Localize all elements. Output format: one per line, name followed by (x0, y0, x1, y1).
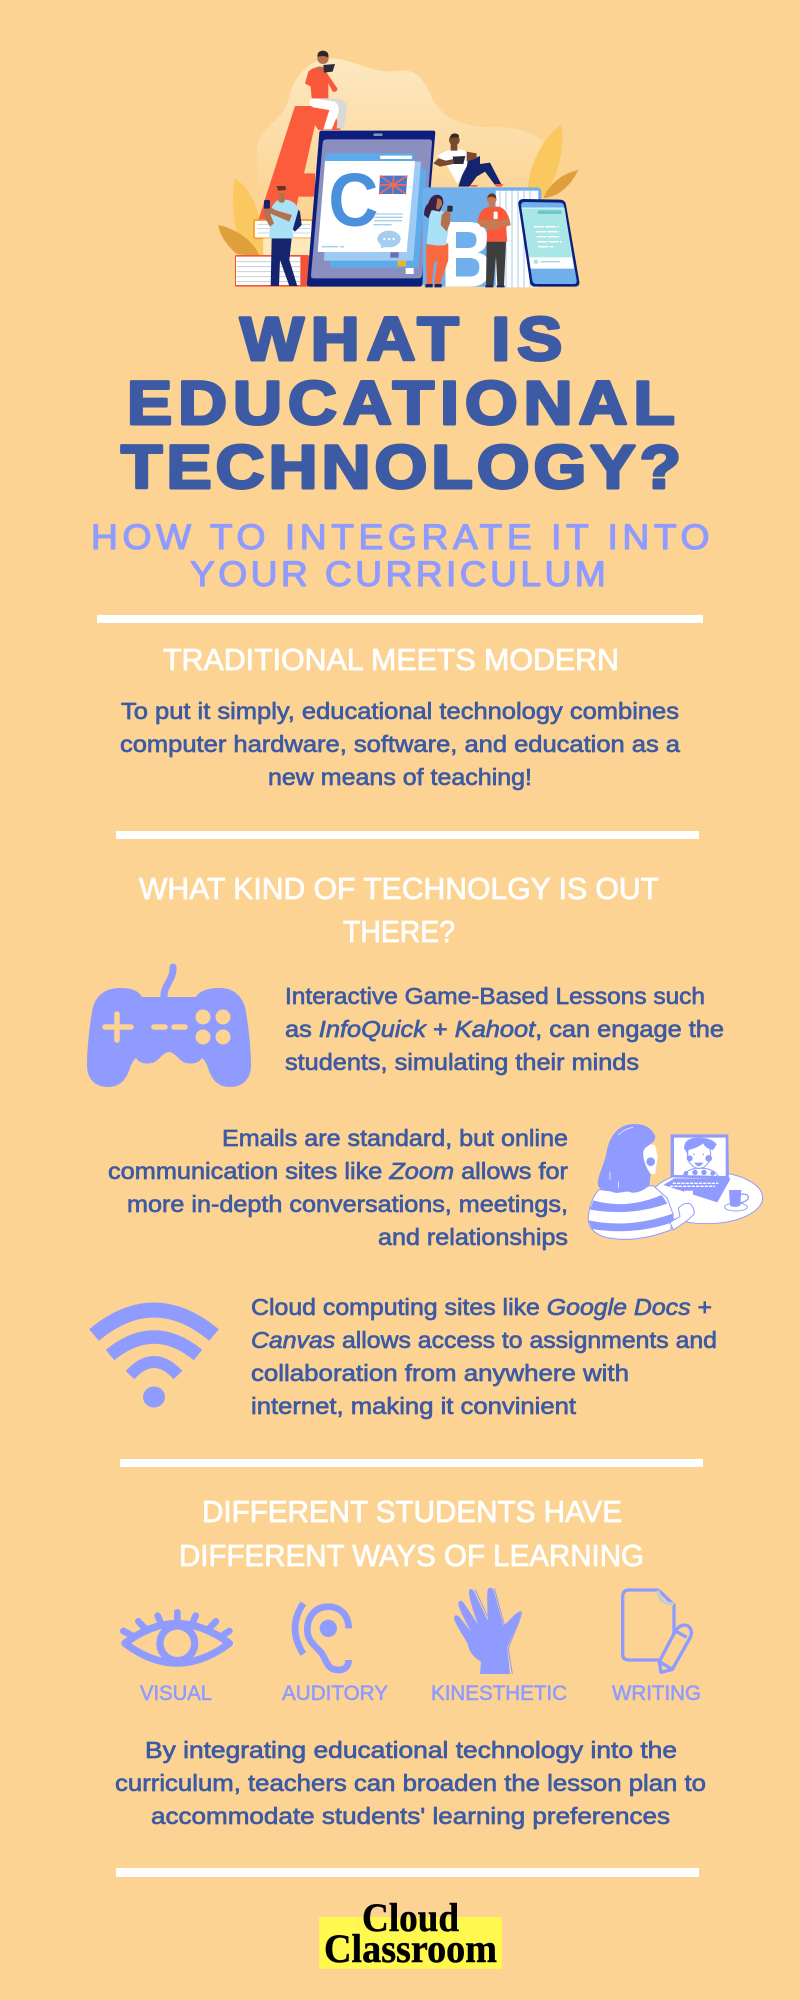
man in red shirt (477, 193, 511, 287)
text block: online communication: Emails are standard, but online (222, 1125, 568, 1151)
hero illustration: students with books, tablet and phone: C (328, 158, 378, 242)
icon: game controller (87, 967, 251, 1087)
heading: different ways of learning (179, 1495, 644, 1573)
subtitle (91, 517, 709, 594)
logo: Cloud Classroom: Cloud (362, 1895, 459, 1940)
heading: different ways of learning: DIFFERENT WAYS OF LEARNING (179, 1539, 644, 1573)
label: auditory: AUDITORY (282, 1682, 388, 1705)
panel: traditional meets modern (120, 643, 681, 790)
label: visual: VISUAL (140, 1682, 212, 1705)
text block: game-based lessons: students, simulating their minds (285, 1049, 639, 1075)
heading: traditional meets modern: TRADITIONAL MEETS MODERN (163, 643, 619, 677)
text block: definition: computer hardware, software, and education as a (120, 731, 681, 757)
text block: cloud computing: internet, making it convinient (251, 1393, 577, 1419)
text block: conclusion: curriculum, teachers can broaden the lesson plan to (115, 1770, 706, 1796)
title: TECHNOLOGY? (121, 432, 681, 501)
icon: wifi signal (94, 1310, 214, 1408)
hero illustration: students with books, tablet and phone (218, 51, 579, 307)
icon: hand, kinesthetic learners (454, 1588, 522, 1674)
text block: definition (120, 698, 681, 790)
text block: cloud computing (251, 1294, 717, 1419)
text block: online communication (108, 1125, 568, 1250)
text block: online communication: communication sites like Zoom allows for (108, 1158, 568, 1184)
icon: eye, visual learners (123, 1612, 229, 1663)
heading: what kind of technology: THERE? (343, 915, 455, 949)
text block: conclusion (115, 1737, 706, 1829)
heading: what kind of technology (139, 872, 659, 949)
title: WHAT IS (240, 304, 562, 373)
text block: cloud computing: collaboration from anywhere with (251, 1360, 629, 1386)
icon: ear, auditory learners (295, 1603, 349, 1670)
woman with phone (424, 195, 453, 287)
hero illustration: students with books, tablet and phone: B (441, 203, 493, 307)
text block: definition: new means of teaching! (268, 764, 532, 790)
person seated on letter A (305, 51, 347, 129)
logo: Cloud Classroom: Classroom (324, 1926, 497, 1971)
text block: conclusion: accommodate students' learning preferences (151, 1803, 670, 1829)
logo: Cloud Classroom (319, 1895, 502, 1971)
heading: different ways of learning: DIFFERENT STUDENTS HAVE (202, 1495, 622, 1529)
text block: game-based lessons: as InfoQuick + Kahoot, can engage the (285, 1016, 724, 1042)
icon: page and pencil, writing learners (623, 1590, 691, 1672)
text block: game-based lessons: Interactive Game-Based Lessons such (285, 983, 705, 1009)
title (121, 304, 681, 501)
title: EDUCATIONAL (127, 368, 675, 437)
text block: cloud computing: Cloud computing sites like Google Docs + (251, 1294, 712, 1320)
text block: conclusion: By integrating educational technology into the (145, 1737, 677, 1763)
subtitle: YOUR CURRICULUM (190, 554, 606, 594)
subtitle: HOW TO INTEGRATE IT INTO (91, 517, 709, 557)
text block: online communication: more in-depth conversations, meetings, (127, 1191, 568, 1217)
person sitting on block (433, 133, 503, 187)
label: writing: WRITING (612, 1682, 701, 1705)
icon: woman on a video call (588, 1124, 763, 1239)
person with backpack (264, 186, 302, 286)
text block: online communication: and relationships (378, 1224, 568, 1250)
label: kinesthetic: KINESTHETIC (431, 1682, 567, 1705)
text block: definition: To put it simply, educational technology combines (121, 698, 679, 724)
text block: game-based lessons (285, 983, 724, 1075)
text block: cloud computing: Canvas allows access to assignments and (251, 1327, 717, 1353)
heading: what kind of technology: WHAT KIND OF TECHNOLGY IS OUT (139, 872, 659, 906)
